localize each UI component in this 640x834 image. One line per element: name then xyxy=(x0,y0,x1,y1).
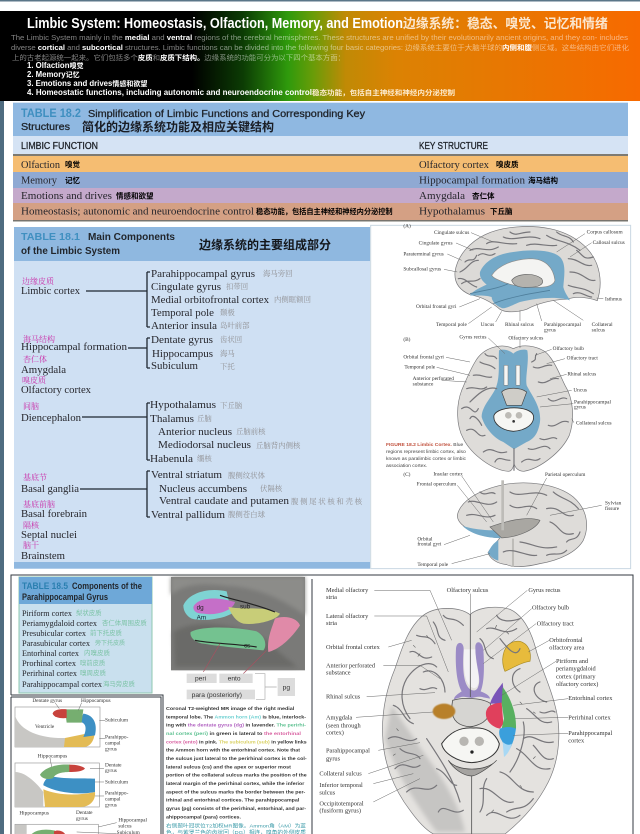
table 18.5 rows: Periamygdaloid cortex xyxy=(22,618,98,628)
MRI description text: irhinal and entorhinal cortices. The parahippocampal xyxy=(166,798,300,804)
group: diencephalon: 下丘脑 xyxy=(220,400,243,411)
sulci xyxy=(388,615,555,818)
group: limbic cortex: 边缘皮质 xyxy=(22,276,54,287)
diagram 1: gyrus xyxy=(105,747,117,753)
centre and right labels: Entorhinal cortex xyxy=(568,695,613,702)
group: limbic cortex: 内侧眶额回 xyxy=(274,294,311,305)
brain A medial view xyxy=(455,227,600,312)
left labels: stria xyxy=(326,620,337,627)
row: memory: Hippocampal formation xyxy=(419,176,526,186)
intro text: 边缘系统主要位于大脑半球的 内侧和腹 侧区域。这些结构由它们进化 xyxy=(405,43,629,52)
table 18.2 heading: 简化的边缘系统功能及相应关键结构 xyxy=(82,119,274,134)
MRI description text: ing with the dentate gyrus (dg) in lavender. The perirhi- xyxy=(166,723,306,729)
brain B inferior view xyxy=(458,346,573,471)
figure caption: regions represent limbic cortex, also xyxy=(386,449,466,455)
coloured cortical areas xyxy=(503,641,530,671)
group: diencephalon: 丘脑前核 xyxy=(236,426,266,437)
figure: limbic cortex brains xyxy=(371,222,631,569)
MRI description text: lateral margin of the perirhinal cortex, while the inferior xyxy=(166,781,304,787)
MRI region labels: pg xyxy=(283,684,290,691)
table 18.2 heading: Simplification of Limbic Functions and Corresponding Key xyxy=(88,108,366,120)
row: memory: Memory xyxy=(21,176,58,186)
row: homeostasis: 稳态功能，包括自主神经和神经内分泌控制 xyxy=(256,207,393,216)
group: hippocampal formation: 海马 xyxy=(220,348,235,359)
panel frames xyxy=(11,575,633,834)
MRI description text: ahippocampal (para) cortices. xyxy=(166,814,242,820)
brain B labels: Orbital frontal gyri xyxy=(403,354,444,361)
row: olfaction xyxy=(21,159,519,171)
MRI description text: gyrus (pg) consists of the perirhinal, entorhinal, and par- xyxy=(166,806,306,812)
group: limbic cortex: Parahippocampal gyrus xyxy=(151,268,255,280)
group: limbic cortex: Limbic cortex xyxy=(21,285,81,297)
table 18.5 rows: 嗅前皮质 xyxy=(80,658,105,667)
group: hippocampal formation: 海马结构 xyxy=(23,334,55,345)
brain B labels: Parahippocampal xyxy=(574,399,611,405)
MRI description text: temporal lobe. The Ammon horn (Am) is blue, interlock- xyxy=(166,714,306,720)
diagram 2 xyxy=(15,753,129,808)
brain A labels: (B) xyxy=(403,336,411,343)
left labels: stria xyxy=(326,594,337,601)
MRI description text: portion of the collateral sulcus marks the position of the xyxy=(166,773,307,779)
group: limbic cortex: Medial orbitofrontal cortex xyxy=(151,294,270,306)
table 18.1 heading: Main Components xyxy=(88,232,175,243)
table 18.5 rows: Parahippocampal cortex xyxy=(22,679,103,689)
group: limbic cortex xyxy=(21,268,311,332)
MRI image: sub xyxy=(240,604,251,611)
brain A labels: (C) xyxy=(403,471,411,478)
brain C labels: fissure xyxy=(605,505,620,512)
diagram 2: campal xyxy=(105,796,121,802)
table 18.1 heading: of the Limbic System xyxy=(21,246,120,257)
group: basal ganglia: 伏隔核 xyxy=(260,483,283,494)
table 18.5 heading: TABLE 18.5 xyxy=(22,581,68,591)
group: basal ganglia xyxy=(21,469,363,521)
MRI image: cs xyxy=(244,642,250,649)
brain B labels: Olfactory sulcus xyxy=(508,334,543,341)
label: septal nuclei xyxy=(21,520,77,541)
table 18.5 rows: Perirhinal cortex xyxy=(22,668,78,678)
panel: table 18.2 xyxy=(13,102,628,222)
left labels: gyrus xyxy=(326,756,341,763)
left labels: substance xyxy=(326,669,351,676)
table 18.1 heading: TABLE 18.1 xyxy=(21,231,80,243)
centre and right labels: Gyrus rectus xyxy=(528,587,561,594)
group: limbic cortex: 颞极 xyxy=(220,307,235,318)
centre and right labels: Piriform and xyxy=(556,658,589,665)
figure caption xyxy=(386,442,467,469)
table 18.5 rows: 内嗅皮质 xyxy=(84,648,110,657)
table 18.5 rows: Parasubicular cortex xyxy=(22,638,91,648)
centre and right labels: Olfactory tract xyxy=(537,620,574,627)
brain A labels: Cingulate gyrus xyxy=(419,241,453,247)
table 18.5 heading xyxy=(22,581,142,602)
diagram 3: Hippocampal xyxy=(118,817,148,823)
brain A labels: Corpus callosum xyxy=(587,229,623,235)
sulci xyxy=(458,232,595,297)
left labels: Parahippocampal xyxy=(326,748,370,755)
group: hippocampal formation: 下托 xyxy=(220,361,235,372)
left labels: Collateral sulcus xyxy=(319,770,362,777)
centre and right labels: Olfactory bulb xyxy=(532,604,569,611)
label: amygdala: 杏仁体 xyxy=(23,354,47,365)
brain A labels xyxy=(403,222,625,478)
intro text: diverse cortical and subcortical structures. Limbic functions can be divided into the following four basic categories: xyxy=(11,43,403,52)
brain A labels: Parahippocampal xyxy=(544,322,581,328)
brain C labels: Temporal pole xyxy=(417,562,449,568)
table 18.2 heading: Structures xyxy=(21,121,70,133)
MRI image xyxy=(171,577,305,699)
title: Limbic System: Homeostasis, Olfaction, Memory, and Emotion xyxy=(27,16,403,32)
group: diencephalon xyxy=(21,399,301,465)
centre and right labels: periamygdaloid xyxy=(556,665,597,672)
group: hippocampal formation: Hippocampus xyxy=(152,348,213,360)
left labels: (seen through xyxy=(326,722,361,729)
brain C labels: Sylvian xyxy=(605,501,622,507)
group: basal ganglia: 基底节 xyxy=(23,472,47,483)
left labels: Inferior temporal xyxy=(319,782,363,789)
numbered list: 2. Memory记忆 xyxy=(27,70,80,79)
row: olfaction: Olfactory cortex xyxy=(419,160,490,171)
brain C labels: Parietal operculum xyxy=(545,472,586,478)
group: hippocampal formation xyxy=(21,334,242,372)
title: 边缘系统：稳态、嗅觉、记忆和情绪 xyxy=(403,16,608,31)
diagram 1: Ventricle xyxy=(35,724,55,730)
brain A labels: Uncus xyxy=(481,322,494,328)
left labels: (fusiform gyrus) xyxy=(319,808,361,815)
MRI description text: cortex (ento) in pink. The subiculum (sub) in yellow links xyxy=(166,739,307,745)
header banner xyxy=(0,11,640,101)
brain B labels: Anterior perforated xyxy=(413,375,454,382)
numbered list: 3. Emotions and drives情感和欲望 xyxy=(27,79,147,88)
brain B labels: substance xyxy=(413,381,434,387)
centre and right labels: Perirhinal cortex xyxy=(568,714,611,721)
group: diencephalon: 丘脑 xyxy=(197,413,212,424)
MRI description text: the sulcus just lateral to the perirhinal cortex is the col- xyxy=(166,756,307,762)
column headers: LIMBIC FUNCTION xyxy=(21,141,98,152)
centre and right labels: Olfactory sulcus xyxy=(447,587,489,594)
left labels: Anterior perforated xyxy=(326,662,376,669)
table 18.5 rows xyxy=(22,608,147,689)
table 18.5 rows: 杏仁体周围皮质 xyxy=(102,618,147,627)
left labels: Orbital frontal cortex xyxy=(326,644,381,651)
diagram 2: Dentate xyxy=(105,762,122,768)
label: brainstem: Brainstem xyxy=(21,550,66,562)
MRI region labels: para (posteriorly) xyxy=(192,692,242,699)
brain A labels: Temporal pole xyxy=(436,322,467,328)
MRI region labels: peri xyxy=(195,676,207,683)
figure caption: association cortex. xyxy=(386,463,427,469)
brain B labels: Rhinal sulcus xyxy=(567,371,596,377)
diagram 1: Hippocampus xyxy=(81,698,111,704)
centre and right labels: olfactory cortex) xyxy=(556,681,598,688)
diagram 3: Dentate xyxy=(76,810,93,816)
numbered list: 1. Olfaction嗅觉 xyxy=(27,61,83,70)
group: basal ganglia: Nucleus accumbens xyxy=(159,483,247,495)
centre and right labels xyxy=(447,587,613,745)
label: amygdala xyxy=(21,354,66,376)
panel: table 18.1 xyxy=(14,227,370,569)
MRI description text: the Ammon horn with the entorhinal cortex. Note that xyxy=(166,748,300,754)
row: memory xyxy=(21,175,558,186)
left labels: Medial olfactory xyxy=(326,587,369,594)
diagram 2: Subiculum xyxy=(105,779,129,785)
label: olfactory cortex xyxy=(21,375,92,396)
intro text: 上的古老起源统一起来。它们包括多个 皮质和皮质下结构。 边缘系统的功能可分为以下四个基本方面： xyxy=(12,53,345,62)
numbered list xyxy=(27,61,455,97)
row: olfaction: Olfaction xyxy=(21,160,61,171)
row: homeostasis: Homeostasis; autonomic and neuroendocrine control xyxy=(21,206,254,218)
brain B labels xyxy=(403,334,612,426)
label: septal nuclei: Septal nuclei xyxy=(21,529,77,541)
group: basal ganglia: 腹侧尾状核和壳核 xyxy=(291,496,363,507)
brain C labels: Insular cortex xyxy=(433,471,463,477)
brain A labels: Collateral xyxy=(592,322,613,328)
MRI region labels xyxy=(187,674,295,699)
brain A labels: gyrus xyxy=(544,327,556,333)
group: diencephalon: Habenula xyxy=(150,453,193,465)
group: diencephalon: 缰核 xyxy=(197,453,212,464)
sulci xyxy=(462,354,568,470)
diagram 3 xyxy=(15,810,148,834)
diagram 2: Parahippo- xyxy=(105,790,129,796)
MRI image: dg xyxy=(197,604,204,611)
group: basal ganglia: 腹侧苍白球 xyxy=(228,509,266,520)
diagram 2: gyrus xyxy=(105,768,117,774)
diagram 3: Hippocampus xyxy=(19,811,49,817)
brain B labels: Collateral sulcus xyxy=(576,420,612,426)
diagram 1 xyxy=(15,698,129,753)
group: basal ganglia: Ventral pallidum xyxy=(151,509,226,521)
diagram 1: Subiculum xyxy=(105,718,129,724)
label: brainstem: 脑干 xyxy=(23,540,39,551)
brain C lateral view xyxy=(457,480,587,567)
sulci xyxy=(467,492,580,555)
group: basal ganglia: 腹侧纹状体 xyxy=(228,470,266,481)
table 18.5 rows: Entorhinal cortex xyxy=(22,648,80,658)
brain B labels: Temporal pole xyxy=(404,365,436,371)
brain A labels: (A) xyxy=(403,222,411,229)
group: limbic cortex: Cingulate gyrus xyxy=(151,281,221,293)
group: diencephalon: Hypothalamus xyxy=(150,399,216,411)
diagram 1: campal xyxy=(105,741,121,747)
table 18.5 rows: Presubicular cortex xyxy=(22,628,87,638)
intro text: The Limbic System mainly in the medial and ventral regions of the cerebral hemispheres. These structures are unified by their evolutionarily ancient origins, and they con- includes xyxy=(11,33,628,42)
diagram 2: Hippocampus xyxy=(38,753,67,759)
group: diencephalon: Mediodorsal nucleus xyxy=(158,439,251,451)
group: hippocampal formation: Subiculum xyxy=(151,360,199,372)
table 18.5 rows: 海马旁皮质 xyxy=(103,679,136,688)
MRI description text xyxy=(166,706,307,834)
row: emotions: Amygdala xyxy=(419,191,465,202)
brain A labels: Rhinal sulcus xyxy=(505,322,534,328)
table 18.5 rows: 嗅周皮质 xyxy=(80,668,106,677)
group: diencephalon: Diencephalon xyxy=(21,412,82,424)
figure caption: known as paralimbic cortex or limbic xyxy=(386,456,467,462)
brain B labels: Gyrus rectus xyxy=(459,335,486,341)
MRI description text: Coronal T2-weighted MR image of the right medial xyxy=(166,706,295,712)
group: diencephalon: 丘脑背内侧核 xyxy=(256,440,301,451)
brain B labels: Olfactory bulb xyxy=(553,345,584,352)
left labels: cortex) xyxy=(326,730,344,737)
left labels: Rhinal sulcus xyxy=(326,694,361,701)
column headers: KEY STRUCTURE xyxy=(419,141,488,152)
label: olfactory cortex: Olfactory cortex xyxy=(21,384,92,396)
table 18.5 heading: Parahippocampal Gyrus xyxy=(22,592,108,602)
diagram 3: sulcus xyxy=(118,823,132,829)
group: basal ganglia: Ventral striatum xyxy=(151,469,223,481)
brain A labels: Paraterminal gyrus xyxy=(403,251,444,257)
table 18.1 heading: 边缘系统的主要组成部分 xyxy=(199,237,331,252)
label: olfactory cortex: 嗅皮质 xyxy=(22,375,46,386)
row: emotions: Emotions and drives xyxy=(21,191,112,202)
table 18.5 rows: 前下托皮质 xyxy=(90,628,123,637)
diagram 3: gyrus xyxy=(76,816,88,822)
diagram 2: gyrus xyxy=(105,802,117,808)
group: limbic cortex: 扣带回 xyxy=(226,281,248,292)
group: limbic cortex: Temporal pole xyxy=(151,307,214,319)
diagram 1: Parahippo- xyxy=(105,735,129,741)
centre and right labels: olfactory area xyxy=(549,644,584,651)
group: limbic cortex: 岛叶前部 xyxy=(220,320,250,331)
row: memory: 记忆 xyxy=(65,175,80,185)
label: basal forebrain xyxy=(21,499,88,520)
panel: table 18.5 xyxy=(19,577,152,693)
row: homeostasis: 下丘脑 xyxy=(490,206,513,216)
centre and right labels: cortex xyxy=(568,738,585,745)
brain A labels: Orbital frontal gyri xyxy=(416,303,457,310)
label: brainstem xyxy=(21,540,66,562)
label: amygdala: Amygdala xyxy=(21,364,66,376)
row: emotions xyxy=(21,190,495,202)
group: hippocampal formation: 齿状回 xyxy=(220,334,242,345)
brain B labels: gyrus xyxy=(574,405,586,411)
table 18.5 rows: 梨状皮质 xyxy=(76,608,102,617)
MRI description text: nal cortex (peri) in green is lateral to the entorhinal xyxy=(166,731,302,737)
group: hippocampal formation: Hippocampal formation xyxy=(21,341,128,353)
row: olfaction: 嗅觉 xyxy=(65,159,80,169)
table 18.2 heading: TABLE 18.2 xyxy=(21,108,81,120)
table 18.2 heading xyxy=(21,108,366,134)
brain C labels xyxy=(417,471,622,568)
panel: hippocampus diagrams xyxy=(15,698,148,834)
numbered list: 稳态功能，包括自主神经和神经内分泌控制 xyxy=(312,88,455,97)
brain A labels: Cingulate sulcus xyxy=(434,230,469,236)
label: septal nuclei: 隔核 xyxy=(23,520,40,531)
numbered list: 4. Homeostatic functions, including autonomic and neuroendocrine control xyxy=(27,88,312,97)
large inferior brain figure xyxy=(319,587,613,834)
left labels: Amygdala xyxy=(326,714,353,721)
centre and right labels: cortex (primary xyxy=(556,673,596,680)
diagram 1: Dentate gyrus xyxy=(32,698,62,704)
group: diencephalon: Thalamus xyxy=(150,413,194,425)
brain A labels: sulcus xyxy=(592,327,605,333)
brain outline and sulci xyxy=(383,607,559,834)
brain A labels: Subcallosal gyrus xyxy=(403,267,441,273)
centre and right labels: Parahippocampal xyxy=(568,730,612,737)
intro text xyxy=(11,33,629,62)
brain C labels: Orbital xyxy=(417,536,433,542)
left labels: Occipitotemporal xyxy=(319,800,364,807)
MRI description text: 右侧颞叶冠状位T2加权MR图像。Ammon角（AM）为蓝 xyxy=(166,822,306,829)
left labels: sulcus xyxy=(319,790,336,797)
group: hippocampal formation: Dentate gyrus xyxy=(151,334,213,346)
brain B labels: Olfactory tract xyxy=(567,354,598,361)
brain B labels: Uncus xyxy=(573,388,587,394)
MRI description text: lateral sulcus (cs) and the apex or superior most xyxy=(166,764,291,770)
table 18.5 rows: Prorhinal cortex xyxy=(22,658,77,668)
row: homeostasis: Hypothalamus xyxy=(419,206,485,218)
brain A labels: Callosal sulcus xyxy=(593,240,625,246)
left labels xyxy=(319,587,452,815)
MRI region labels: ento xyxy=(228,676,241,683)
row: emotions: 杏仁体 xyxy=(472,190,495,200)
group: diencephalon: 间脑 xyxy=(23,401,39,412)
left labels: Lateral olfactory xyxy=(326,613,369,620)
table 18.5 heading: Components of the xyxy=(72,581,142,591)
group: basal ganglia: Ventral caudate and putamen xyxy=(159,495,290,507)
column headers xyxy=(21,141,488,152)
MRI description text: aspect of the sulcus marks the border between the per- xyxy=(166,789,306,795)
row: olfaction: 嗅皮质 xyxy=(496,159,519,169)
table 18.5 rows: Piriform cortex xyxy=(22,608,73,618)
row: homeostasis xyxy=(21,206,513,218)
label: basal forebrain: 基底前脑 xyxy=(23,499,55,510)
group: diencephalon: Anterior nucleus xyxy=(158,426,232,438)
table 18.5 rows: 旁下托皮质 xyxy=(95,639,125,647)
brain C labels: frontal gyri xyxy=(417,541,442,548)
figure caption: FIGURE 18.2 Limbic Cortex. Blue xyxy=(386,442,464,448)
table 18.1 heading xyxy=(21,231,331,257)
brain C labels: Frontal operculum xyxy=(417,481,457,487)
MRI image: Am xyxy=(197,614,206,621)
group: basal ganglia: Basal ganglia xyxy=(21,483,79,495)
row: emotions: 情感和欲望 xyxy=(116,190,154,200)
centre and right labels: Orbitofrontal xyxy=(549,637,583,644)
group: limbic cortex: 海马旁回 xyxy=(263,268,293,279)
group: limbic cortex: Anterior insula xyxy=(151,320,217,332)
brain A labels: Isthmus xyxy=(605,297,622,303)
label: basal forebrain: Basal forebrain xyxy=(21,508,88,520)
row: memory: 海马结构 xyxy=(528,175,558,185)
